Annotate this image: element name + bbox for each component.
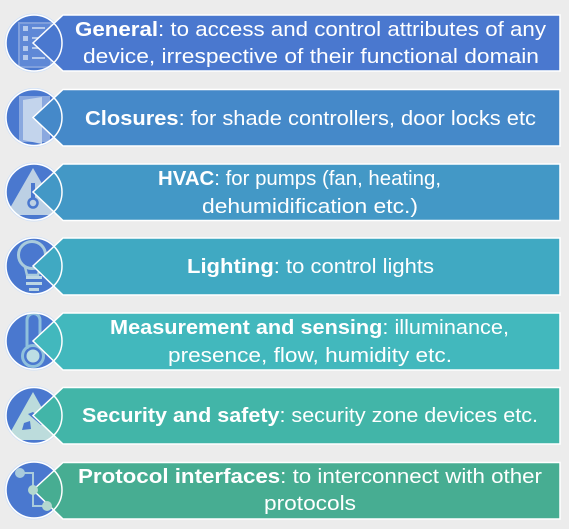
text: HVAC: HVAC: for pumps (fan, heating, xyxy=(158,168,441,190)
icon: warning triangle camera xyxy=(11,392,53,440)
text: Security and safety: Security and safety : security zone devices etc. xyxy=(82,405,538,427)
text: Measurement and sensing: presence, flow, humidity etc. xyxy=(168,345,452,367)
text: Measurement and sensing xyxy=(110,317,509,367)
row: Measurement and sensing xyxy=(5,312,560,370)
row: Lighting xyxy=(5,237,560,295)
text: Lighting: Lighting : to control lights xyxy=(187,256,434,278)
icon: checklist xyxy=(18,22,52,68)
row: Security and safety xyxy=(5,386,560,444)
icon: warning triangle thermometer xyxy=(11,168,53,215)
icon: thermometer xyxy=(22,314,44,366)
bar: Measurement and sensing xyxy=(33,313,560,370)
text: General: device, irrespective of their functional domain xyxy=(83,46,539,68)
icon: upper and lower nodes xyxy=(28,485,52,511)
text: Protocol interfaces: protocols xyxy=(264,493,356,515)
text: General: General : to access and control attributes of any xyxy=(75,19,546,41)
text: Protocol interfaces: Protocol interfaces : to interconnect with other xyxy=(78,466,542,488)
bar: Lighting xyxy=(33,238,560,295)
icon: connected nodes xyxy=(15,468,42,507)
bar: General xyxy=(33,15,560,71)
icon: door xyxy=(19,96,50,144)
row: General xyxy=(5,14,560,72)
text: Protocol interfaces xyxy=(78,466,542,515)
icon: light bulb xyxy=(18,242,46,291)
bar: Protocol interfaces xyxy=(33,462,560,519)
text: HVAC xyxy=(158,168,441,218)
text: Measurement and sensing: Measurement and sensing : illuminance, xyxy=(110,317,509,339)
text: Closures: Closures : for shade controllers, door locks etc xyxy=(85,108,536,130)
bar: Closures xyxy=(33,90,560,146)
row: Protocol interfaces xyxy=(5,461,560,519)
text: General xyxy=(75,19,546,68)
row: Closures xyxy=(5,88,560,146)
text: HVAC: dehumidification etc.) xyxy=(202,196,418,218)
bar: HVAC xyxy=(33,164,560,220)
row: HVAC xyxy=(5,163,560,221)
bar: Security and safety xyxy=(33,388,560,444)
